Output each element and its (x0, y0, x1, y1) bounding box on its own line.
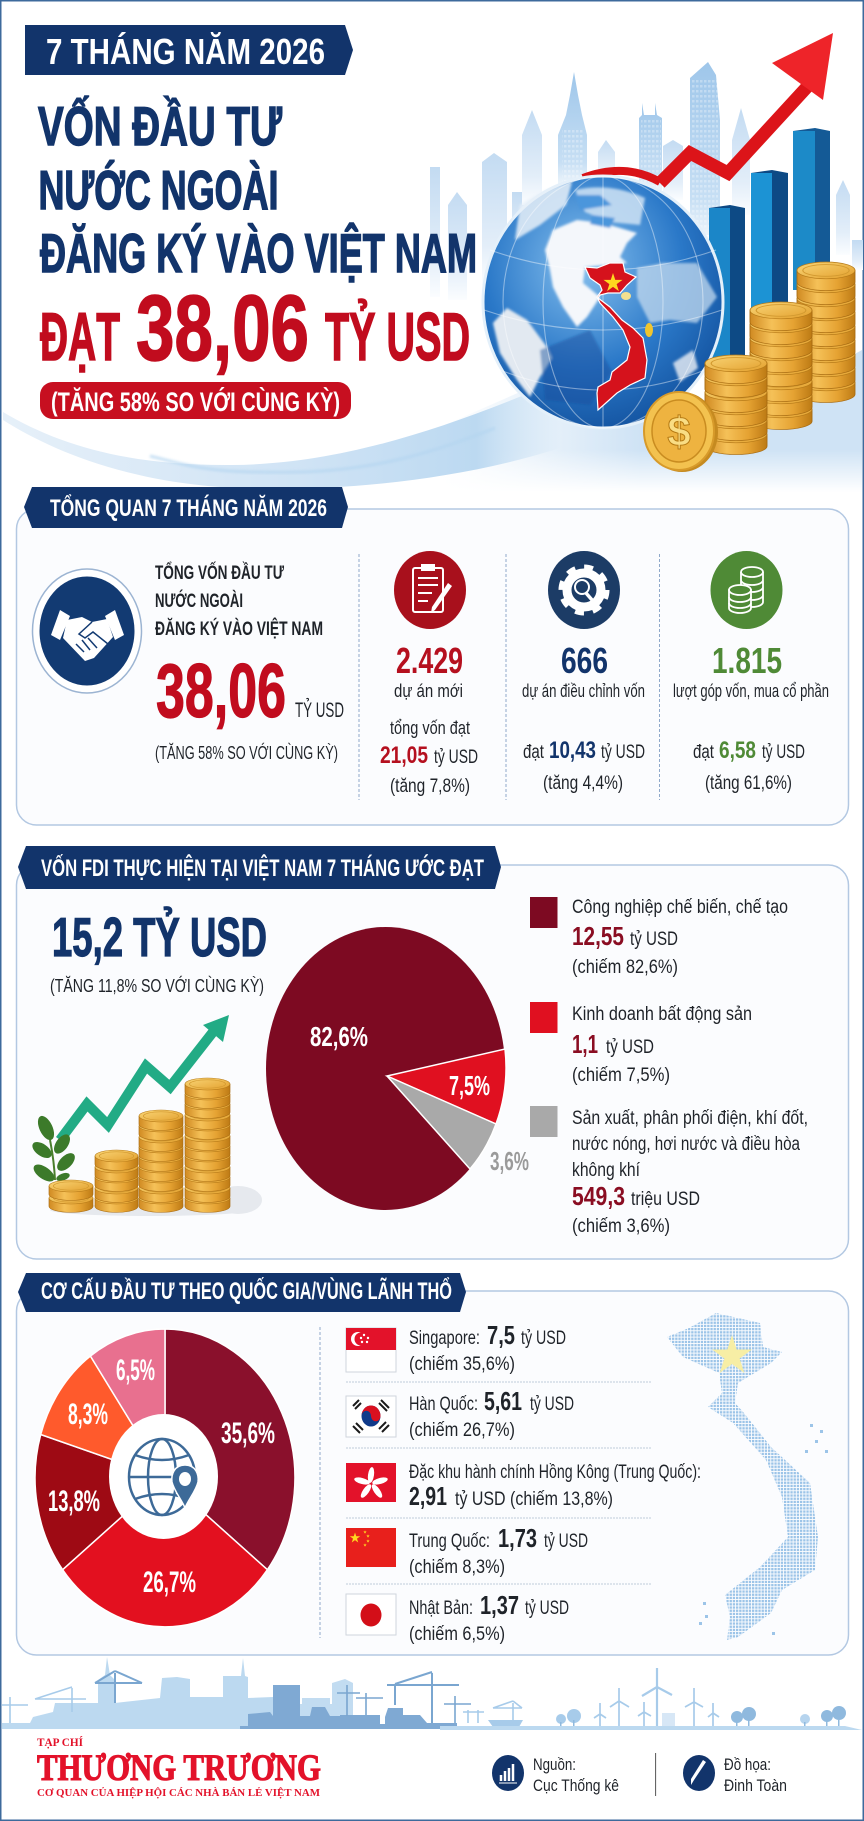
realized FDI figure: (TĂNG 11,8% SO VỚI CÙNG KỲ) (50, 975, 264, 996)
row: Hong Kong (346, 1462, 701, 1511)
hero title (38, 95, 477, 284)
legend: manufacturing: 12,55 (572, 921, 624, 951)
ship (488, 1720, 523, 1727)
logo: TẠP CHÍ (37, 1735, 83, 1749)
darker harbour buildings (240, 1685, 457, 1729)
credit: graphics (683, 1755, 787, 1795)
hero figure: 38,06 (136, 276, 309, 380)
legend: utilities: (chiếm 3,6%) (572, 1216, 670, 1237)
hero figure (40, 276, 470, 380)
red rising arrow (660, 33, 833, 183)
legend: utilities (530, 1106, 808, 1237)
hero section (3, 25, 863, 492)
icon: bar chart badge (492, 1755, 524, 1791)
row: Singapore: Singapore: (409, 1328, 480, 1349)
credit: source: Cục Thống kê (533, 1776, 619, 1795)
coin stacks (644, 262, 855, 472)
icon: flag of Japan (346, 1594, 396, 1635)
legend: real estate (530, 1002, 752, 1086)
stat: new projects (380, 551, 478, 797)
legend: utilities: không khí (572, 1160, 641, 1181)
icon: flag of Hong Kong (346, 1463, 396, 1502)
row: South Korea: (chiếm 26,7%) (409, 1420, 515, 1441)
row: Singapore: tỷ USD (521, 1328, 566, 1349)
heading: overview (24, 487, 348, 528)
legend: real estate: tỷ USD (606, 1037, 654, 1058)
stat: capital contributions: 1.815 (712, 640, 782, 681)
stat: adjusted projects: 10,43 (549, 737, 596, 764)
icon: coins (710, 551, 782, 629)
icon: flag of Singapore (346, 1328, 396, 1372)
heading: overview: TỔNG QUAN 7 THÁNG NĂM 2026 (50, 494, 327, 522)
donut chart: investment by partner: 26,7% (143, 1566, 196, 1599)
logo: CƠ QUAN CỦA HIỆP HỘI CÁC NHÀ BÁN LẺ VIỆT NAM (37, 1786, 321, 1799)
row: Singapore (346, 1320, 566, 1375)
legend: utilities: triệu USD (631, 1189, 700, 1210)
row: Japan: Nhật Bản: (409, 1598, 473, 1619)
period badge: 7 THÁNG NĂM 2026 (46, 31, 325, 72)
realized FDI figure (50, 906, 267, 996)
stat: capital contributions: (tăng 61,6%) (705, 773, 792, 794)
stat: adjusted projects: tỷ USD (601, 742, 645, 763)
wind turbines (594, 1668, 719, 1726)
skyline (430, 62, 863, 300)
row: China: (chiếm 8,3%) (409, 1557, 505, 1578)
icon: pencil badge (683, 1755, 715, 1791)
stat: adjusted projects: (tăng 4,4%) (543, 773, 623, 794)
row: Japan (346, 1590, 569, 1645)
panel: overview (16, 487, 848, 825)
total capital text: ĐĂNG KÝ VÀO VIỆT NAM (155, 618, 323, 640)
legend: manufacturing (530, 897, 788, 978)
hero figure: ĐẠT (40, 299, 120, 375)
icon: handshake (32, 569, 142, 693)
stat: new projects: tổng vốn đạt (390, 718, 470, 738)
stat: capital contributions (673, 551, 829, 794)
donut chart: investment by partner: 13,8% (48, 1485, 100, 1518)
panel: investors by country (16, 1273, 848, 1655)
legend: real estate: Kinh doanh bất động sản (572, 1004, 752, 1025)
row: Singapore: (chiếm 35,6%) (409, 1354, 515, 1375)
pie chart: FDI by sector: 3,6% (490, 1146, 529, 1176)
credit: graphics: Đinh Toàn (724, 1776, 787, 1795)
total capital text: TỶ USD (295, 699, 344, 722)
total capital text: NƯỚC NGOÀI (155, 590, 243, 612)
hero title: VỐN ĐẦU TƯ (38, 95, 282, 157)
row: Japan: 1,37 (480, 1590, 519, 1620)
legend: utilities: nước nóng, hơi nước và điều hòa (572, 1134, 800, 1155)
stat: capital contributions: 6,58 (719, 737, 756, 764)
icon: flag of South Korea (346, 1396, 396, 1437)
stat: new projects: tỷ USD (434, 747, 478, 768)
total capital text: 38,06 (156, 649, 286, 734)
bar chart (709, 128, 830, 365)
row: Japan: (chiếm 6,5%) (409, 1624, 505, 1645)
big dollar coin (644, 392, 718, 472)
globe (483, 176, 723, 428)
map of Vietnam on the globe (585, 263, 653, 410)
row: China: 1,73 (498, 1523, 537, 1553)
credit: source: Nguồn: (533, 1755, 576, 1774)
row: China (346, 1523, 588, 1578)
pie chart: FDI by sector: 82,6% (310, 1021, 368, 1052)
hero swoosh background (3, 350, 862, 492)
big dollar coin: $ (667, 408, 691, 455)
legend: utilities: Sản xuất, phân phối điện, khí đốt, (572, 1108, 808, 1129)
credit: graphics: Đồ họa: (724, 1755, 771, 1774)
stat: new projects: 21,05 (380, 742, 428, 769)
legend: manufacturing: Công nghiệp chế biến, chế tạo (572, 897, 788, 918)
row: Hong Kong: Đặc khu hành chính Hồng Kông (Trung Quốc): (409, 1462, 701, 1483)
row: South Korea (346, 1386, 574, 1441)
icon: gear (548, 551, 620, 629)
row: South Korea: 5,61 (484, 1386, 522, 1416)
total capital text (155, 562, 344, 763)
stat: adjusted projects: đạt (523, 742, 545, 763)
donut chart: investment by partner: 8,3% (68, 1398, 108, 1431)
logo (37, 1735, 321, 1799)
realized FDI figure: 15,2 TỶ USD (52, 906, 267, 968)
pie chart: FDI by sector: 7,5% (449, 1070, 490, 1101)
donut chart: investment by partner (35, 1329, 295, 1627)
row: Hong Kong: 2,91 (409, 1481, 447, 1511)
legend: utilities: 549,3 (572, 1181, 625, 1211)
stat: adjusted projects: dự án điều chỉnh vốn (522, 681, 645, 701)
credit: source (492, 1755, 619, 1795)
total capital text: TỔNG VỐN ĐẦU TƯ (155, 562, 284, 584)
icon: clipboard (394, 551, 466, 629)
footer skyline (2, 1657, 862, 1730)
stat: adjusted projects: 666 (561, 640, 608, 681)
trees (556, 1706, 846, 1727)
legend: real estate: (chiếm 7,5%) (572, 1065, 670, 1086)
hero growth pill (40, 382, 351, 419)
panel: realized FDI (16, 846, 848, 1259)
total capital text: (TĂNG 58% SO VỚI CÙNG KỲ) (155, 742, 338, 763)
stat: adjusted projects (522, 551, 645, 794)
stat: capital contributions: tỷ USD (762, 742, 805, 763)
legend: manufacturing: tỷ USD (630, 929, 678, 950)
icon: coins with growth arrow (30, 1015, 262, 1216)
red rising arrow tail behind globe (583, 171, 660, 182)
hero title: NƯỚC NGOÀI (38, 159, 278, 221)
row: Singapore: 7,5 (487, 1320, 515, 1350)
row: Hong Kong: tỷ USD (chiếm 13,8%) (455, 1489, 613, 1510)
stat: new projects: (tăng 7,8%) (390, 776, 470, 797)
donut chart: investment by partner: 35,6% (221, 1417, 275, 1450)
heading: realized FDI (18, 846, 501, 889)
hero title: ĐĂNG KÝ VÀO VIỆT NAM (40, 222, 477, 284)
legend: real estate: 1,1 (572, 1029, 598, 1059)
row: China: tỷ USD (544, 1531, 588, 1552)
donut chart: investment by partner: 6,5% (116, 1354, 155, 1387)
stat: new projects: dự án mới (394, 681, 463, 701)
row: Japan: tỷ USD (525, 1598, 569, 1619)
row: South Korea: tỷ USD (530, 1394, 574, 1415)
hero figure: TỶ USD (325, 298, 470, 375)
heading: investors by country (18, 1273, 466, 1312)
heading: realized FDI: VỐN FDI THỰC HIỆN TẠI VIỆT NAM 7 THÁNG ƯỚC ĐẠT (41, 854, 484, 882)
stat: new projects: 2.429 (396, 640, 463, 681)
row: China: Trung Quốc: (409, 1531, 490, 1552)
hero growth pill: (TĂNG 58% SO VỚI CÙNG KỲ) (51, 386, 340, 417)
legend: manufacturing: (chiếm 82,6%) (572, 957, 678, 978)
row: South Korea: Hàn Quốc: (409, 1394, 478, 1415)
stat: capital contributions: đạt (693, 742, 715, 763)
cranes (2, 1671, 522, 1723)
heading: investors by country: CƠ CẤU ĐẦU TƯ THEO QUỐC GIA/VÙNG LÃNH THỔ (41, 1277, 452, 1305)
dotted map of Vietnam (667, 1313, 828, 1640)
icon: globe with location pin (129, 1439, 198, 1515)
icon: flag of China (346, 1528, 396, 1567)
logo: THƯƠNG TRƯƠNG (37, 1748, 321, 1789)
pie chart: FDI by sector (266, 927, 529, 1210)
